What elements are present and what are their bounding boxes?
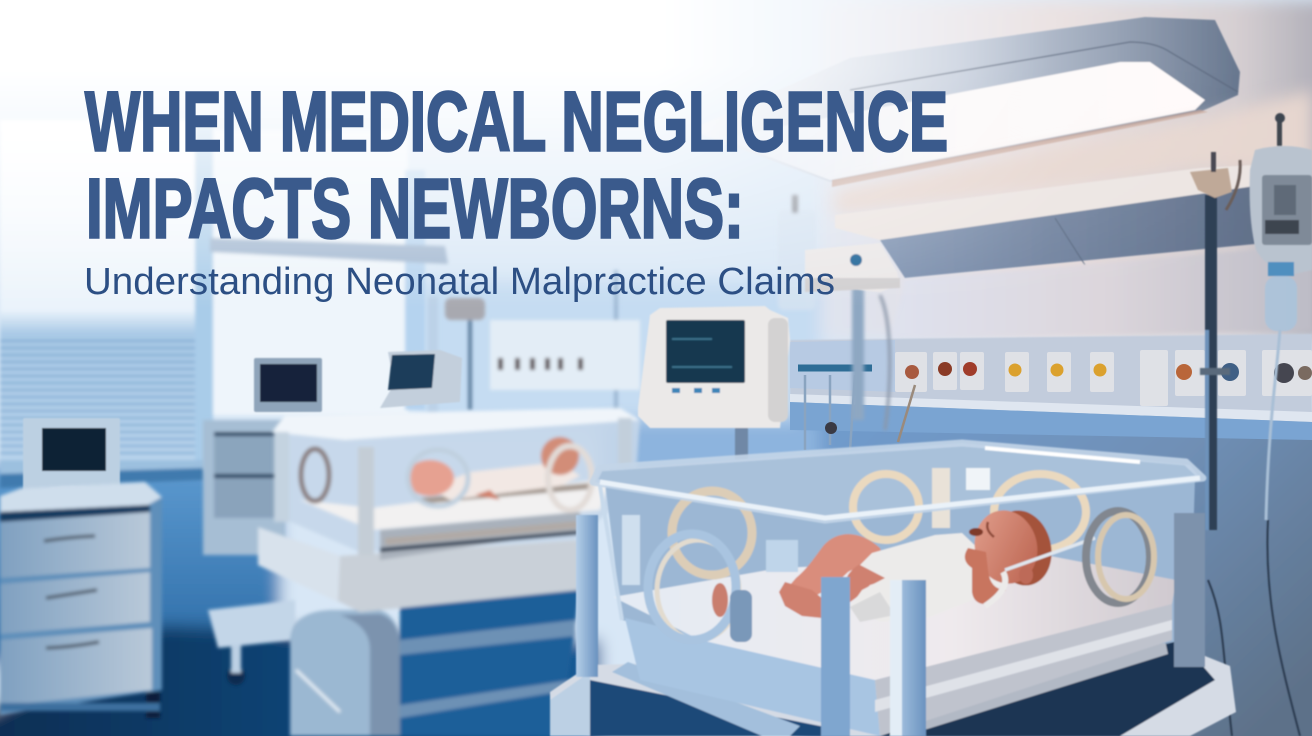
window with blinds <box>0 120 448 488</box>
IV pole with clamp <box>1190 152 1240 530</box>
background baby <box>406 437 580 500</box>
wall under lamp <box>835 90 1312 215</box>
right porthole <box>1086 511 1154 603</box>
background incubator <box>258 408 640 736</box>
central monitor on stand <box>638 306 790 460</box>
mattress <box>613 556 1176 736</box>
back portholes <box>672 474 1086 575</box>
front porthole <box>648 534 752 642</box>
base trolley <box>550 640 1236 736</box>
tube across baby <box>1005 538 1095 570</box>
base pedestal <box>290 590 580 736</box>
hood interior <box>605 478 1195 680</box>
ceiling lamp <box>690 17 1240 187</box>
title line 1: WHEN MEDICAL NEGLIGENCE <box>85 74 948 168</box>
IV drip behind monitor <box>428 195 890 430</box>
back monitors <box>254 350 462 412</box>
white device head <box>805 243 900 292</box>
outlet knobs <box>905 362 1312 383</box>
wall band below shelf <box>890 245 1312 338</box>
title <box>85 74 948 256</box>
far-left desktop monitor <box>23 418 120 502</box>
main incubator <box>550 443 1236 736</box>
corner posts <box>576 513 1205 736</box>
white top fade <box>0 0 1238 286</box>
subtitle: Understanding Neonatal Malpractice Claims <box>84 261 835 303</box>
IV bag with drip tube <box>1208 113 1312 736</box>
wall rail with outlets <box>790 334 1312 450</box>
outlet plates <box>895 350 1312 406</box>
hood rim <box>593 443 1203 620</box>
baby <box>712 504 1059 622</box>
wall shelf light <box>835 165 1255 278</box>
title line 2: IMPACTS NEWBORNS: <box>86 162 744 256</box>
cabinet with drawers <box>0 482 162 718</box>
rolling cart <box>203 420 295 685</box>
